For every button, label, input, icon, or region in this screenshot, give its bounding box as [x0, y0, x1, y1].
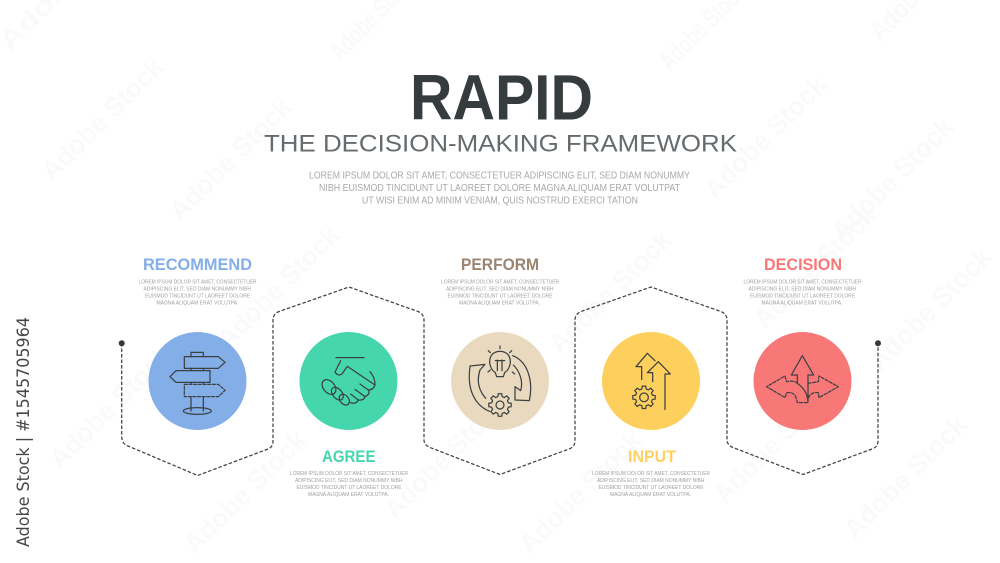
text: perform: ADIPISCING ELIT, SED DIAM NONUMMY NIBH: [446, 287, 554, 293]
icon: three way arrows: [767, 356, 838, 403]
watermark pattern: Adobe Stock: [513, 424, 648, 559]
circle: input: [602, 332, 700, 430]
icon: signpost: [170, 352, 225, 414]
watermark pattern: Adobe Stock: [178, 424, 313, 559]
start dot: [119, 340, 125, 346]
text: decision: LOREM IPSUM DOLOR SIT AMET, CONSECTETUER: [744, 280, 862, 286]
text: decision: ADIPISCING ELIT, SED DIAM NONUMMY NIBH: [748, 287, 856, 293]
watermark pattern: Adobe Stock: [748, 199, 883, 334]
icon: bulb, cycle arrows and gear: [469, 346, 531, 416]
watermark pattern: Adobe Stock: [708, 374, 843, 509]
text: input: [592, 471, 710, 498]
panel: perform: [441, 256, 559, 430]
dashed hexagon connector line: [122, 287, 878, 476]
watermark pattern: Adobe Stock: [863, 241, 998, 376]
text: perform: LOREM IPSUM DOLOR SIT AMET, CONSECTETUER: [441, 280, 559, 286]
stock id label: Adobe Stock | #1545705964: [14, 317, 34, 547]
intro text block: [309, 170, 690, 206]
watermark pattern: Adobe Stock: [543, 224, 678, 359]
intro text block: LOREM IPSUM DOLOR SIT AMET, CONSECTETUER ADIPISCING ELIT, SED DIAM NONUMMY: [309, 170, 690, 182]
watermark pattern: Adobe Stock: [163, 91, 298, 226]
panel: input: [592, 332, 710, 498]
circle: decision: [754, 332, 852, 430]
text: recommend: EUISMOD TINCIDUNT UT LAOREET DOLORE: [145, 294, 250, 300]
text: agree: MAGNA ALIQUAM ERAT VOLUTPA.: [308, 492, 389, 498]
watermark pattern: Adobe Stock: [698, 69, 833, 204]
text: input: EUISMOD TINCIDUNT UT LAOREET DOLORE: [598, 485, 704, 491]
panel: agree: [290, 332, 408, 498]
heading: perform: PERFORM: [461, 256, 539, 274]
icon: handshake: [319, 358, 375, 407]
circle: recommend: [148, 332, 246, 430]
watermark pattern: Adobe Stock: [838, 409, 973, 544]
text: recommend: ADIPISCING ELIT, SED DIAM NONUMMY NIBH: [144, 287, 251, 293]
title: RAPID: [410, 62, 593, 134]
text: perform: EUISMOD TINCIDUNT UT LAOREET DOLORE: [448, 294, 553, 300]
text: input: MAGNA ALIQUAM ERAT VOLUTPA.: [610, 492, 691, 498]
panel: recommend: [138, 256, 257, 430]
circle: agree: [300, 332, 398, 430]
icon: up arrows and gear: [633, 353, 670, 409]
text: decision: [744, 280, 862, 307]
watermark pattern: Adobe Stock: [43, 339, 178, 474]
text: recommend: [138, 280, 257, 307]
text: agree: LOREM IPSUM DOLOR SIT AMET, CONSECTETUER: [290, 471, 408, 477]
text: agree: EUISMOD TINCIDUNT UT LAOREET DOLORE: [296, 485, 402, 491]
watermark pattern: Adobe Stock: [211, 219, 346, 354]
end dot: [875, 340, 881, 346]
text: input: LOREM IPSUM DOLOR SIT AMET, CONSECTETUER: [592, 471, 710, 477]
intro text block: UT WISI ENIM AD MINIM VENIAM, QUIS NOSTRUD EXERCI TATION: [362, 196, 638, 206]
circle: perform: [451, 332, 549, 430]
text: decision: EUISMOD TINCIDUNT UT LAOREET DOLORE: [750, 294, 855, 300]
text: recommend: LOREM IPSUM DOLOR SIT AMET, CONSECTETUER: [138, 280, 257, 286]
text: decision: MAGNA ALIQUAM ERAT VOLUTPA.: [762, 301, 842, 307]
text: perform: MAGNA ALIQUAM ERAT VOLUTPA.: [459, 301, 540, 307]
watermark pattern: Adobe Stock: [825, 111, 960, 246]
text: perform: [441, 280, 559, 307]
text: agree: ADIPISCING ELIT, SED DIAM NONUMMY NIBH: [295, 478, 403, 484]
heading: agree: AGREE: [322, 448, 376, 466]
text: agree: [290, 471, 408, 498]
intro text block: NIBH EUISMOD TINCIDUNT UT LAOREET DOLORE MAGNA ALIQUAM ERAT VOLUTPAT: [319, 183, 680, 194]
watermark pattern: Adobe Stock: [378, 389, 513, 524]
heading: recommend: RECOMMEND: [143, 256, 252, 274]
text: input: ADIPISCING ELIT, SED DIAM NONUMMY NIBH: [597, 478, 705, 484]
heading: input: INPUT: [628, 448, 676, 466]
text: recommend: MAGNA ALIQUAM ERAT VOLUTPA.: [156, 301, 238, 307]
panel: decision: [744, 256, 862, 430]
heading: decision: DECISION: [764, 256, 842, 274]
watermark pattern: Adobe Stock: [35, 51, 170, 186]
subtitle: THE DECISION-MAKING FRAMEWORK: [264, 130, 738, 158]
